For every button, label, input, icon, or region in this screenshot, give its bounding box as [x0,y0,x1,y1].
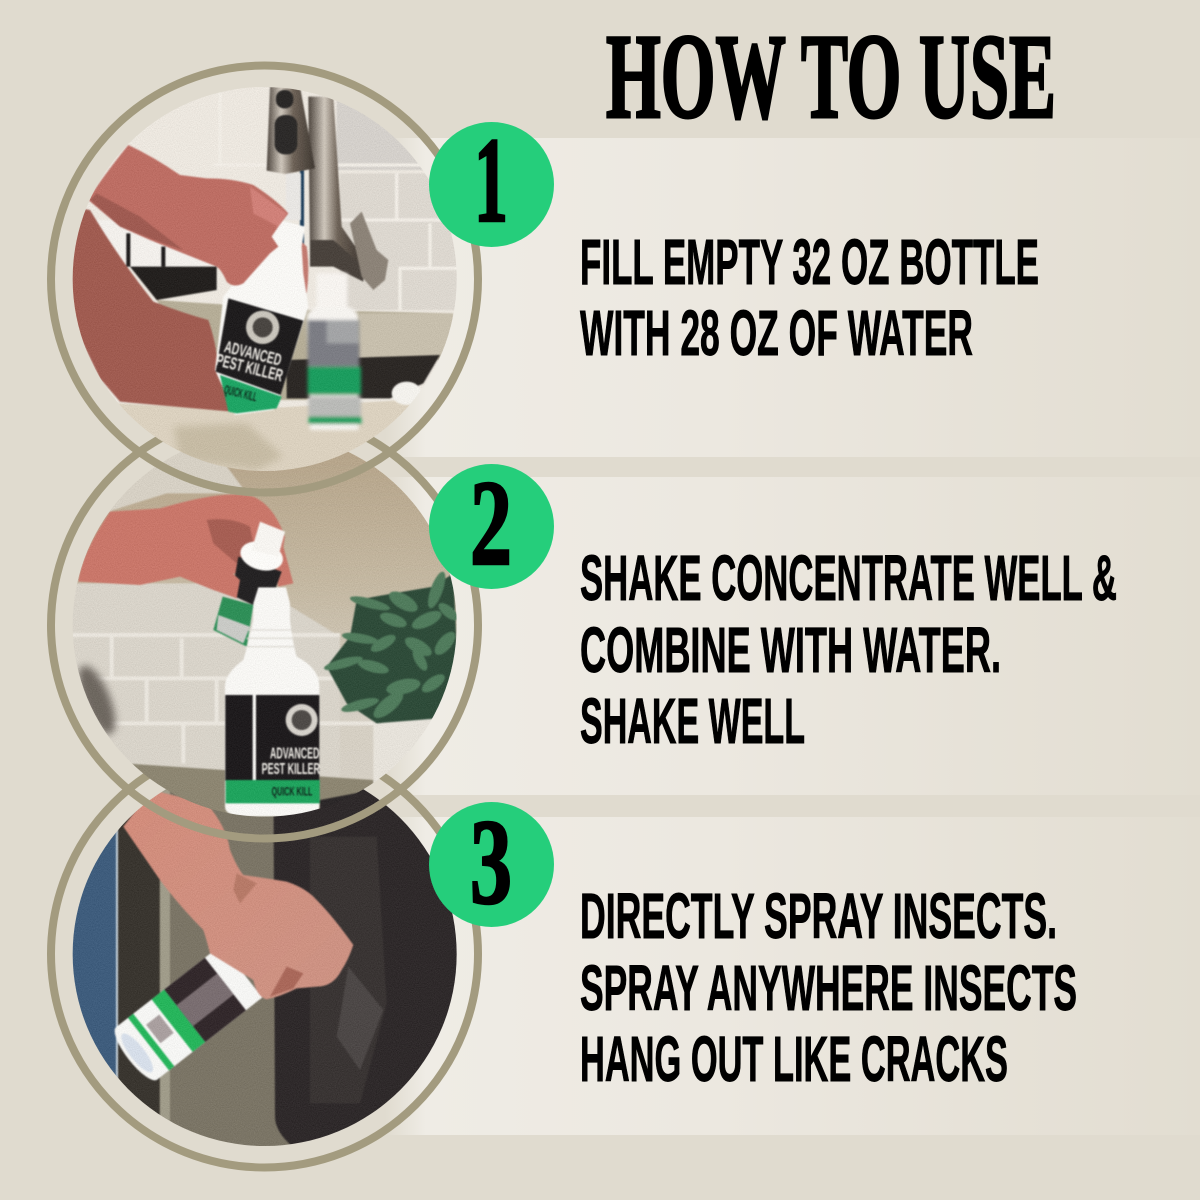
step 3 text [580,880,1077,1095]
main bottle: ADVANCED [222,337,284,370]
sprayed bottle [114,952,263,1082]
lower arm [70,207,232,412]
step 2 number badge [429,456,554,591]
step 3 number badge: 3 [470,795,512,930]
big bottle [225,587,320,817]
ring 3 [51,740,478,1168]
thumb [180,573,241,599]
big bottle: QUICK KILL [272,785,312,799]
main bottle [214,220,308,415]
plant [323,570,461,723]
back fingers [300,242,310,294]
step 2 number badge: 2 [470,456,512,591]
panel: step 2 band [385,477,1200,795]
step 2 text: SHAKE WELL [580,685,805,757]
step 2 text [580,542,1117,757]
step 3 number badge [429,795,554,930]
big bottle: PEST KILLER [262,761,320,778]
photo: filling bottle with water [70,83,460,477]
ring 1 [51,66,478,492]
panel: step 3 band [385,817,1200,1135]
blurred concentrate bottle [307,273,361,430]
hand back fingers [78,495,293,587]
panel: step 1 band [385,138,1200,457]
photo: spraying insects [70,760,460,1150]
big bottle: ADVANCED [270,745,319,762]
photo: combining concentrate [72,452,457,817]
main bottle: PEST KILLER [214,349,285,385]
main bottle: QUICK KILL [223,383,258,404]
arm and fist [123,790,353,999]
step 1 number badge [429,113,554,248]
small bottle [213,522,286,647]
ring 2 [51,412,478,838]
step 1 text [580,226,1039,369]
plant pot [372,718,432,783]
faucet [267,87,388,303]
upper arm and hand [88,145,288,285]
step 1 number badge: 1 [474,113,508,248]
